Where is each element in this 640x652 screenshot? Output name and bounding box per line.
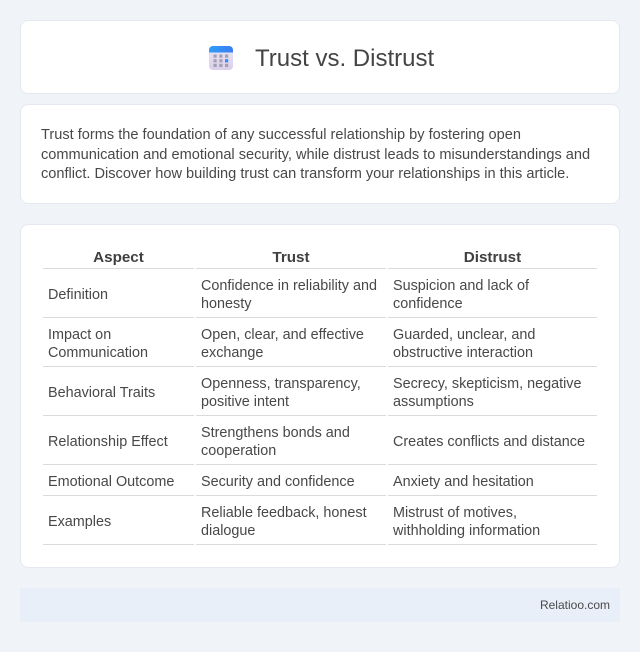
comparison table: Open, clear, and effective <box>201 327 364 343</box>
comparison table: confidence <box>393 296 463 312</box>
header: aspect: Aspect <box>93 249 144 266</box>
intro text: conflict. Discover how building trust can transform your relationships in this article. <box>41 166 569 182</box>
intro text: Trust forms the foundation of any successful relationship by fostering open <box>41 127 521 143</box>
header card <box>20 20 620 94</box>
comparison table: honesty <box>201 296 251 312</box>
comparison table: Reliable feedback, honest <box>201 505 367 521</box>
comparison table: Creates conflicts and distance <box>393 434 585 450</box>
icon: calendar <box>209 46 233 70</box>
row: emotional outcome: Emotional Outcome <box>48 474 174 490</box>
comparison table: Confidence in reliability and <box>201 278 377 294</box>
comparison table: Openness, transparency, <box>201 376 361 392</box>
comparison table: exchange <box>201 345 263 361</box>
comparison table: positive intent <box>201 394 289 410</box>
row: definition: Definition <box>48 287 108 303</box>
comparison table: Secrecy, skepticism, negative <box>393 376 581 392</box>
footer credit: Relatioo.com <box>540 598 610 612</box>
intro text <box>41 127 590 182</box>
row: examples: Examples <box>48 514 111 530</box>
comparison table: Mistrust of motives, <box>393 505 517 521</box>
title: Trust vs. Distrust <box>255 45 434 72</box>
comparison table: assumptions <box>393 394 474 410</box>
header: distrust: Distrust <box>464 249 521 266</box>
comparison table: Suspicion and lack of <box>393 278 529 294</box>
comparison table: Security and confidence <box>201 474 355 490</box>
row: impact on communication: Communication <box>48 345 148 361</box>
row: impact on communication <box>48 327 148 361</box>
row: behavioral traits: Behavioral Traits <box>48 385 155 401</box>
comparison table: cooperation <box>201 443 276 459</box>
intro text: communication and emotional security, while distrust leads to misunderstandings and <box>41 146 590 162</box>
comparison table: dialogue <box>201 523 255 539</box>
comparison table: withholding information <box>393 523 540 539</box>
footer bar <box>20 588 620 622</box>
table card <box>20 224 620 568</box>
comparison table: Strengthens bonds and <box>201 425 350 441</box>
header: trust: Trust <box>272 249 310 266</box>
comparison table: Anxiety and hesitation <box>393 474 534 490</box>
comparison table: Guarded, unclear, and <box>393 327 535 343</box>
row: impact on communication: Impact on <box>48 327 111 343</box>
row: relationship effect: Relationship Effect <box>48 434 168 450</box>
comparison table: obstructive interaction <box>393 345 533 361</box>
intro card <box>20 104 620 204</box>
